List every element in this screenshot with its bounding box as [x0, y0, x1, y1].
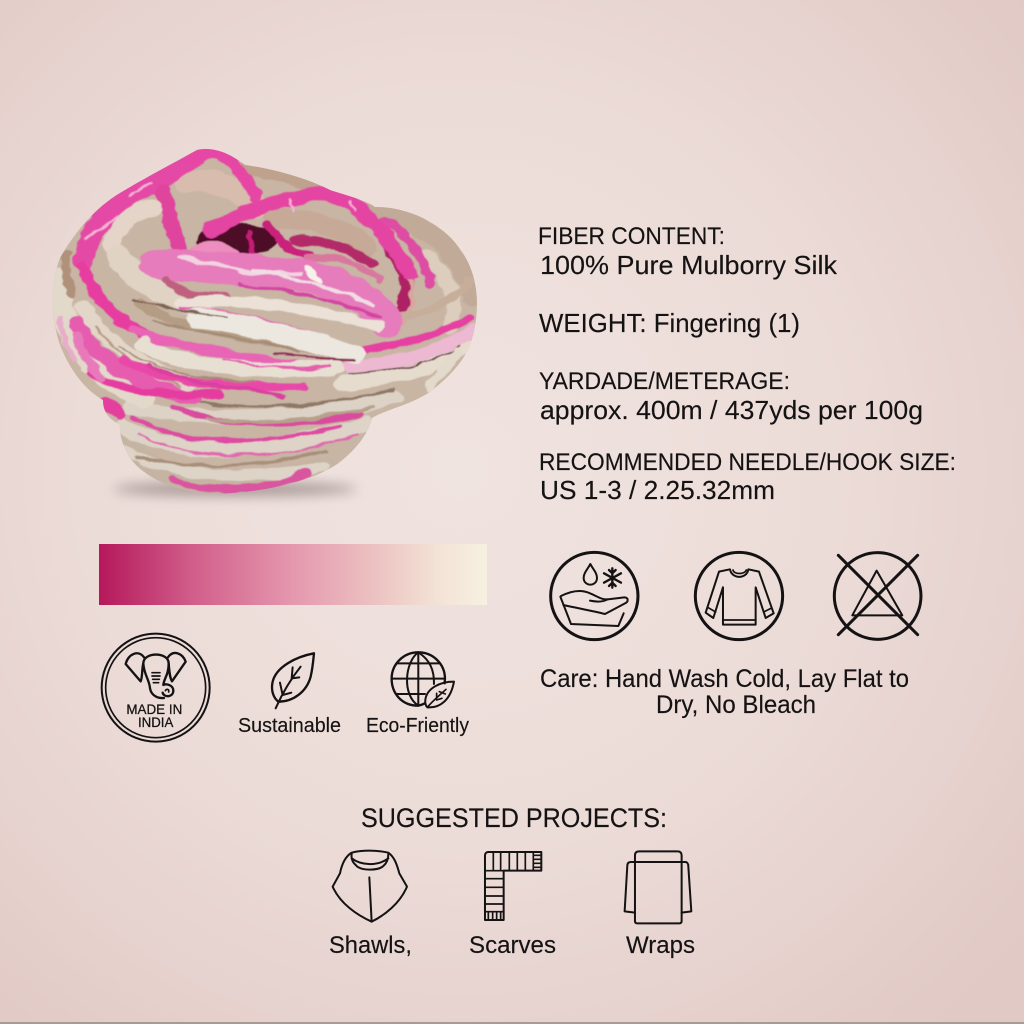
product specifications text [538, 223, 956, 505]
outer left of upper coil [60, 280, 143, 397]
label: eco-friently: Eco-Friently [366, 715, 469, 737]
lower coil [120, 440, 327, 485]
icon: do not bleach [834, 553, 921, 639]
product specifications text: FIBER CONTENT: [538, 223, 725, 250]
top magenta rope [83, 157, 193, 260]
icon: lay flat sweater [695, 552, 783, 640]
icon: wrap [625, 851, 691, 923]
care instructions text: Dry, No Bleach [656, 691, 816, 719]
icon: shawl [333, 851, 407, 922]
top back strands [247, 168, 333, 192]
label: shawls: Shawls, [329, 932, 412, 959]
icon: scarf [485, 852, 541, 920]
product specifications text: US 1-3 / 2.25.32mm [540, 475, 775, 505]
care icons [551, 552, 921, 640]
heading: suggested projects: SUGGESTED PROJECTS: [361, 803, 667, 833]
badge text: made in india: INDIA [138, 714, 174, 730]
product specifications text: 100% Pure Mulborry Silk [540, 250, 838, 280]
care instructions text [540, 665, 909, 719]
icon: globe with leaf [392, 652, 454, 707]
badge text: made in india [126, 701, 182, 730]
care instructions text: Care: Hand Wash Cold, Lay Flat to [540, 665, 909, 693]
icon: hand wash cold [551, 552, 638, 640]
hole [197, 224, 277, 256]
product specifications text: approx. 400m / 437yds per 100g [540, 395, 923, 425]
icon: sustainable leaf [272, 653, 314, 708]
badge text: made in india: MADE IN [126, 701, 182, 717]
badge row [102, 634, 469, 742]
product specifications text: YARDADE/METERAGE: [539, 368, 790, 395]
suggested projects row [329, 851, 695, 959]
label: sustainable: Sustainable [238, 715, 341, 737]
right side coil [373, 212, 473, 297]
product specifications text: RECOMMENDED NEEDLE/HOOK SIZE: [539, 449, 956, 476]
yarn photo illustration [40, 140, 490, 500]
label: wraps: Wraps [626, 932, 695, 959]
icon: made in india elephant badge [102, 634, 210, 742]
inner white and pink coil [112, 208, 153, 243]
colour gradient swatch bar [99, 544, 487, 605]
label: scarves: Scarves [469, 932, 556, 959]
product specifications text: WEIGHT: Fingering (1) [539, 308, 800, 338]
